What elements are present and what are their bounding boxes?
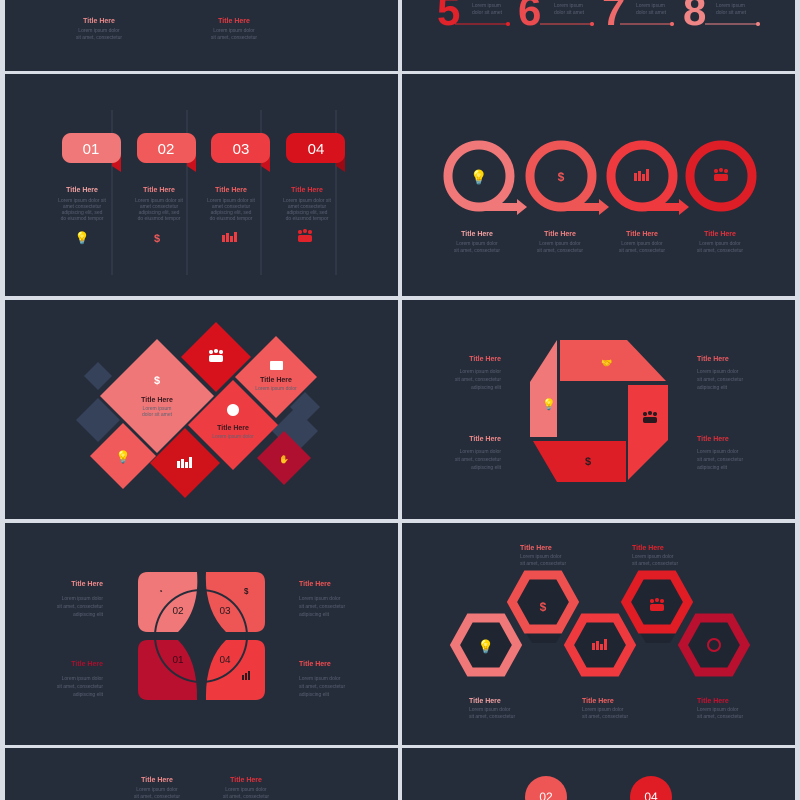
circle 3: [611, 145, 689, 215]
segment left: 💡: [542, 398, 556, 411]
diamond: big main: dolor sit amet: [142, 412, 173, 418]
text blocks: adipiscing elit: [73, 612, 104, 618]
captions: Lorem ipsum dolor: [456, 241, 498, 247]
tab 01: Title Here: [66, 187, 98, 194]
segment right: [628, 385, 668, 480]
captions: Title Here: [544, 231, 576, 238]
panel: bottom-left slide: sit amet, consectetur: [223, 794, 269, 800]
panel: bottom-right circles: [402, 748, 795, 800]
panel: bottom-left slide: Title Here: [230, 777, 262, 784]
text blocks: [455, 356, 502, 471]
tab 02: adipiscing elit, sed: [139, 210, 180, 216]
quadrant 04: 04: [219, 655, 231, 666]
segment top: [560, 340, 666, 381]
captions: Title Here: [697, 698, 729, 705]
diamond: bottom: [150, 428, 220, 498]
panel: four quadrants: sit amet, consectetur: [299, 604, 345, 610]
captions: sit amet, consectetur: [697, 714, 743, 720]
quadrant 01: [138, 640, 197, 700]
segment top: 🤝: [601, 358, 613, 368]
panel: octagon cycle: Title Here: [697, 356, 729, 363]
number 8: [683, 0, 760, 34]
captions: Lorem ipsum dolor: [520, 554, 562, 560]
captions: Title Here: [469, 698, 501, 705]
text block 2: [211, 18, 257, 41]
captions: Lorem ipsum dolor: [539, 241, 581, 247]
panel: four quadrants: sit amet, consectetur: [299, 684, 345, 690]
hexagon 1: [455, 618, 517, 672]
panel: four quadrants: adipiscing elit: [299, 692, 330, 698]
segment bottom: [533, 441, 626, 482]
segment left: [530, 340, 557, 437]
panel: bottom-left slide: Title Here: [141, 777, 173, 784]
captions: Lorem ipsum dolor: [469, 707, 511, 713]
tab 03: Lorem ipsum dolor sit: [207, 198, 256, 204]
panel: bottom-left slide: Lorem ipsum dolor: [225, 787, 267, 793]
captions: Title Here: [632, 545, 664, 552]
segment bottom: $: [585, 456, 591, 468]
captions: Title Here: [461, 231, 493, 238]
tab 03: do eiusmod tempor: [210, 216, 253, 222]
tab 04: Lorem ipsum dolor sit: [283, 198, 332, 204]
captions: Title Here: [520, 545, 552, 552]
tab 04: adipiscing elit, sed: [287, 210, 328, 216]
number 7: [602, 0, 674, 34]
number 5: dolor sit amet: [472, 10, 503, 16]
panel: bottom-left slide: [5, 748, 398, 800]
circle 1: 💡: [470, 169, 488, 186]
text blocks: sit amet, consectetur: [455, 457, 501, 463]
text block 1: Title Here: [83, 18, 115, 25]
number 5: Lorem ipsum: [472, 3, 501, 9]
number 5: [437, 0, 510, 34]
text blocks: adipiscing elit: [73, 692, 104, 698]
diamond: right top: Title Here: [260, 377, 292, 384]
tab 04: amet consectetur: [288, 204, 327, 210]
panel: octagon cycle: sit amet, consectetur: [697, 377, 743, 383]
circle 2: [530, 145, 609, 215]
number 7: Lorem ipsum: [636, 3, 665, 9]
diamond: center: Title Here: [217, 425, 249, 432]
hexagon 3: [569, 618, 631, 672]
text blocks: sit amet, consectetur: [57, 684, 103, 690]
text blocks: Title Here: [71, 661, 103, 668]
text block 1: [76, 18, 122, 41]
circle 4: [690, 145, 752, 207]
panel: numbers 5-8: [402, 0, 795, 71]
diamond: big main: Title Here: [141, 397, 173, 404]
text block 2: sit amet, consectetur: [211, 35, 257, 41]
number 8: dolor sit amet: [716, 10, 747, 16]
number 7: dolor sit amet: [636, 10, 667, 16]
tab 02: $: [154, 233, 160, 245]
hexagon 1: 💡: [478, 639, 494, 654]
text blocks: adipiscing elit: [471, 465, 502, 471]
text block 1: sit amet, consectetur: [76, 35, 122, 41]
hexagon 2: $: [540, 600, 547, 614]
captions: Lorem ipsum dolor: [699, 241, 741, 247]
tab 01: [58, 133, 121, 245]
text blocks: Title Here: [469, 356, 501, 363]
tab 01: amet consectetur: [63, 204, 102, 210]
diamond: right top: Lorem ipsum dolor: [255, 386, 297, 392]
captions: Lorem ipsum dolor: [632, 554, 674, 560]
captions: [469, 545, 743, 720]
panel: octagon cycle: Lorem ipsum dolor: [697, 369, 739, 375]
tab 01: 01: [83, 141, 99, 158]
text blocks: Lorem ipsum dolor: [460, 369, 501, 375]
text blocks: sit amet, consectetur: [455, 377, 501, 383]
captions: Lorem ipsum dolor: [697, 707, 739, 713]
captions: sit amet, consectetur: [520, 561, 566, 567]
text block 1: Lorem ipsum dolor: [78, 28, 120, 34]
panel: top-left slide: [5, 0, 398, 71]
text blocks: Lorem ipsum dolor: [62, 596, 103, 602]
panel: four quadrants: Title Here: [299, 581, 331, 588]
panel: octagon cycle: Lorem ipsum dolor: [697, 449, 739, 455]
number 6: dolor sit amet: [554, 10, 585, 16]
quadrant 02: 02: [172, 606, 184, 617]
panel: four quadrants: Lorem ipsum dolor: [299, 596, 341, 602]
number 6: Lorem ipsum: [554, 3, 583, 9]
panel: octagon cycle: adipiscing elit: [697, 465, 728, 471]
tab 01: do eiusmod tempor: [61, 216, 104, 222]
panel: octagon cycle: adipiscing elit: [697, 385, 728, 391]
tab 03: Title Here: [215, 187, 247, 194]
tab 04: [283, 133, 345, 242]
captions: Lorem ipsum dolor: [582, 707, 624, 713]
diamond: top red: [181, 322, 251, 392]
diamond: bottom right: [257, 431, 311, 485]
tab 04: Title Here: [291, 187, 323, 194]
tab 04: do eiusmod tempor: [286, 216, 329, 222]
tab 02: 02: [158, 141, 174, 158]
tab 01: adipiscing elit, sed: [62, 210, 103, 216]
tab 02: do eiusmod tempor: [138, 216, 181, 222]
number 6: [518, 0, 594, 34]
quadrant 03: [206, 572, 265, 632]
number 8: Lorem ipsum: [716, 3, 745, 9]
circle 04: [630, 776, 672, 800]
panel: octagon cycle: [402, 300, 795, 519]
tab 03: [207, 133, 270, 242]
text blocks: Lorem ipsum dolor: [460, 449, 501, 455]
panel: octagon cycle: Title Here: [697, 436, 729, 443]
text blocks: [57, 581, 104, 698]
captions: Lorem ipsum dolor: [621, 241, 663, 247]
circle 2: $: [558, 170, 565, 184]
tab 02: [135, 133, 196, 245]
text block 2: Lorem ipsum dolor: [213, 28, 255, 34]
tab 01: Lorem ipsum dolor sit: [58, 198, 107, 204]
hexagon 5: [683, 618, 745, 672]
panel: four quadrants: Lorem ipsum dolor: [299, 676, 341, 682]
panel: four quadrants: adipiscing elit: [299, 612, 330, 618]
tab 03: amet consectetur: [212, 204, 251, 210]
captions: sit amet, consectetur: [619, 248, 665, 254]
diamond: big main: $: [154, 375, 160, 387]
quadrant 03: 03: [219, 606, 231, 617]
tab 02: Lorem ipsum dolor sit: [135, 198, 184, 204]
diamond: big main: Lorem ipsum: [143, 406, 171, 412]
captions: sit amet, consectetur: [632, 561, 678, 567]
captions: sit amet, consectetur: [454, 248, 500, 254]
quadrant 03: $: [244, 587, 249, 596]
captions: sit amet, consectetur: [537, 248, 583, 254]
captions: Title Here: [704, 231, 736, 238]
diamond: bottom left: [90, 423, 156, 489]
captions: sit amet, consectetur: [697, 248, 743, 254]
quadrant 01: 01: [172, 655, 184, 666]
quadrant 02: [138, 572, 197, 632]
quadrant 04: [206, 640, 265, 700]
text blocks: Title Here: [71, 581, 103, 588]
text blocks: Lorem ipsum dolor: [62, 676, 103, 682]
quadrant 02: ◔: [158, 587, 163, 596]
tab 02: Title Here: [143, 187, 175, 194]
circle 1: [448, 145, 527, 215]
diamond: big main: [100, 339, 214, 453]
captions: sit amet, consectetur: [582, 714, 628, 720]
captions: Title Here: [626, 231, 658, 238]
diamond: right top: [235, 336, 317, 418]
tab 04: 04: [308, 141, 324, 158]
panel: four quadrants: [5, 523, 398, 745]
hexagon 2: [512, 575, 574, 629]
tab 03: 03: [233, 141, 249, 158]
hexagon 4: [626, 575, 688, 629]
text blocks: Title Here: [469, 436, 501, 443]
tab 01: 💡: [75, 231, 89, 245]
tab 03: adipiscing elit, sed: [211, 210, 252, 216]
circle 02: [525, 776, 567, 800]
panel: hexagon chain: [402, 523, 795, 745]
panel: diamonds: [5, 300, 398, 519]
text blocks: adipiscing elit: [471, 385, 502, 391]
tab 02: amet consectetur: [140, 204, 179, 210]
panel: numbered tabs 01-04: [5, 74, 398, 296]
diamond: bottom right: ✋: [279, 454, 289, 464]
diamond: center: [188, 380, 278, 470]
captions: sit amet, consectetur: [469, 714, 515, 720]
panel: circular arrows: [402, 74, 795, 296]
panel: bottom-left slide: Lorem ipsum dolor: [136, 787, 178, 793]
panel: bottom-left slide: sit amet, consectetur: [134, 794, 180, 800]
captions: Title Here: [582, 698, 614, 705]
captions: [454, 231, 743, 254]
diamond: center: Lorem ipsum dolor: [212, 434, 254, 440]
text block 2: Title Here: [218, 18, 250, 25]
panel: four quadrants: Title Here: [299, 661, 331, 668]
text blocks: sit amet, consectetur: [57, 604, 103, 610]
panel: octagon cycle: sit amet, consectetur: [697, 457, 743, 463]
diamond: bottom left: 💡: [116, 450, 130, 464]
